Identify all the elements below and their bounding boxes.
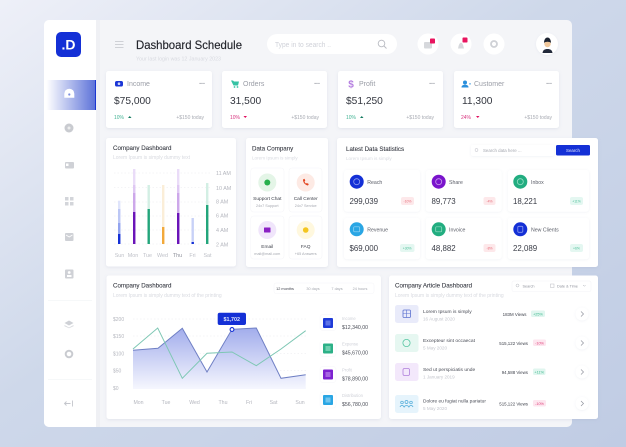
bar chart: Tue xyxy=(143,253,152,259)
stat tile: new clients: New Clients xyxy=(531,228,559,234)
legend: profit xyxy=(320,366,368,382)
legend: income: $12,340,00 xyxy=(342,325,368,331)
article filters: Search xyxy=(522,284,535,288)
stat tile: share: Share xyxy=(449,180,463,186)
article row 3 xyxy=(395,363,588,381)
bar chart: Sat xyxy=(203,253,212,259)
search field xyxy=(267,34,397,54)
bar chart xyxy=(114,169,232,259)
legend: profit: Profit xyxy=(342,368,353,372)
stat tile: share xyxy=(426,170,502,212)
subheading: Lorem Ipsum is simply xyxy=(346,156,392,161)
legend: income xyxy=(320,314,368,331)
legend: expense: Expense xyxy=(342,342,359,346)
stat tile: invoice: -8% xyxy=(486,246,493,250)
stat tile: inbox: Inbox xyxy=(531,180,544,186)
line chart: Mon xyxy=(133,400,144,406)
stat tile: revenue: Revenue xyxy=(367,228,388,234)
subheading: Lorem Ipsum is simply xyxy=(252,156,298,160)
tile: support chat: 24x7 Support xyxy=(256,204,280,208)
article row 3: 94,588 Views xyxy=(502,370,529,375)
stat tile: revenue: $69,000 xyxy=(350,244,379,253)
search field: Type in to search .. xyxy=(275,42,331,49)
article row 2: 515,122 Views xyxy=(499,341,529,346)
range tabs xyxy=(274,283,374,294)
stat card: profit: 10% xyxy=(346,115,357,121)
line chart: $150 xyxy=(113,334,124,340)
icon: settings xyxy=(484,34,504,54)
panel: latest data statistics xyxy=(337,138,598,267)
tile: email xyxy=(251,216,284,259)
panel: company dashboard bar chart xyxy=(106,138,236,266)
stat card: profit xyxy=(338,71,443,128)
article row 4: 515,122 Views xyxy=(499,402,529,406)
line chart: Sat xyxy=(270,400,278,406)
nav icon: layers xyxy=(64,320,74,328)
range tabs: 24 hours xyxy=(353,287,367,291)
nav icon: inbox xyxy=(65,233,74,241)
tile: call center: 24x7 Service xyxy=(295,204,317,208)
heading: Data Company xyxy=(252,146,294,152)
stat card: customer: +$150 today xyxy=(524,115,552,121)
line chart: Tue xyxy=(162,400,170,406)
article row 4: 5 May 2020 xyxy=(423,406,447,411)
stat card: customer: Customer xyxy=(474,81,505,88)
tile: faq xyxy=(289,216,322,259)
line chart: Fri xyxy=(246,400,252,406)
bar chart: 6 AM xyxy=(216,214,229,220)
range tabs: 30 days xyxy=(306,287,320,291)
article row 4 xyxy=(395,395,588,413)
sidebar xyxy=(44,20,100,427)
subheading: Lorem Ipsum is simply dummy text of the printing xyxy=(395,293,504,299)
article row 3: +11% xyxy=(534,370,545,374)
stat card: customer xyxy=(454,71,559,128)
heading: Company Dashboard xyxy=(113,145,172,152)
bar chart: 11 AM xyxy=(216,171,231,177)
tooltip xyxy=(218,313,246,331)
stat card: income: Income xyxy=(127,81,150,88)
nav item: home active xyxy=(46,80,96,110)
line chart: $100 xyxy=(113,352,124,358)
stat card: orders: ... xyxy=(314,79,320,86)
line chart xyxy=(113,313,306,406)
line chart: $200 xyxy=(113,317,124,323)
stat card: profit: Profit xyxy=(359,81,375,88)
article filters: Date & Time xyxy=(557,284,578,288)
stat tile: reach xyxy=(344,170,420,212)
article row 1: 16 August 2020 xyxy=(423,316,455,322)
search box xyxy=(471,145,554,156)
legend: distribution xyxy=(320,392,368,408)
stat card: orders xyxy=(222,71,327,128)
bar chart: Fri xyxy=(189,253,196,259)
legend: expense: $45,670,00 xyxy=(342,350,368,356)
panel: company article dashboard xyxy=(389,276,598,419)
article filters xyxy=(512,281,591,292)
tile: support chat xyxy=(251,168,284,212)
bar chart: 10 AM xyxy=(216,186,232,192)
article row 1 xyxy=(395,305,588,323)
last login subtitle: Your last login was 12 January 2023 xyxy=(136,56,221,62)
article row 2: -10% xyxy=(535,341,545,345)
nav icon: add xyxy=(64,124,74,132)
line chart: $50 xyxy=(113,368,122,374)
logo: .D xyxy=(62,36,76,52)
article row 1: Lorem Ipsum is simply xyxy=(423,309,472,315)
stat tile: new clients: 22,089 xyxy=(513,244,538,253)
panel: company dashboard line chart xyxy=(106,276,381,419)
tooltip: $1,702 xyxy=(224,317,240,323)
stat card: orders: 31,500 xyxy=(230,96,261,107)
nav icon: profile xyxy=(65,270,74,278)
article row 2: 5 May 2020 xyxy=(423,346,447,350)
nav icon: id card xyxy=(65,162,74,168)
stat card: income: $75,000 xyxy=(114,96,151,107)
line chart: $0 xyxy=(113,386,119,392)
article row 4: Dolore eu fugiat nulla pariatur xyxy=(423,398,486,404)
tile: call center: Call Center xyxy=(294,196,318,202)
stat tile: revenue xyxy=(344,218,420,259)
stat tile: inbox: 18,221 xyxy=(513,197,537,206)
logo xyxy=(56,32,81,57)
article row 2 xyxy=(395,334,588,352)
stat tile: new clients xyxy=(508,218,589,259)
stat card: income: ... xyxy=(199,79,205,86)
main dashboard panel xyxy=(44,20,572,427)
bar chart: Sun xyxy=(115,253,124,259)
stat card: orders: +$150 today xyxy=(291,115,319,121)
bar chart: Wed xyxy=(157,253,168,259)
stat tile: reach: Reach xyxy=(367,180,382,186)
heading: Company Article Dashboard xyxy=(395,282,473,290)
stat card: customer: 24% xyxy=(461,115,472,121)
avatar xyxy=(536,33,558,55)
line chart: Sun xyxy=(295,400,305,406)
stat card: customer: 11,300 xyxy=(462,96,493,107)
line chart: Wed xyxy=(189,400,200,406)
stat tile: share: 89,773 xyxy=(432,197,456,206)
article row 1: +25% xyxy=(533,312,544,316)
search button: Search xyxy=(566,148,581,153)
top bar xyxy=(115,33,558,62)
stat card: customer: ... xyxy=(546,79,552,86)
tile: faq: FAQ xyxy=(301,244,311,250)
legend: expense xyxy=(320,340,368,356)
stat tile: reach: 299,039 xyxy=(350,197,379,206)
stat tile: share: -4% xyxy=(486,200,493,204)
article row 3: 1 January 2019 xyxy=(423,374,455,380)
tile: support chat: Support Chat xyxy=(253,196,282,202)
tile: faq: +65 Answers xyxy=(295,252,317,256)
stat card: income xyxy=(106,71,212,128)
icon: orders xyxy=(231,80,239,88)
range tabs: 7 days xyxy=(331,287,343,291)
icon: profit: $ xyxy=(348,80,354,90)
stat tile: invoice xyxy=(426,218,502,259)
legend: income: Income xyxy=(342,316,356,321)
bar chart: 8 AM xyxy=(216,200,229,206)
stat card: income: 10% xyxy=(114,115,125,121)
legend: distribution: Distribution xyxy=(342,393,364,398)
article row 4: -10% xyxy=(535,402,545,406)
bar chart: Mon xyxy=(128,253,138,259)
search button xyxy=(556,145,590,156)
stat tile: invoice: Invoice xyxy=(449,228,466,234)
title: Dashboard Schedule xyxy=(136,38,242,52)
stat card: orders: Orders xyxy=(243,81,265,88)
line chart: Thu xyxy=(219,400,228,406)
tile: email: mail@mail.com xyxy=(254,252,280,256)
stat tile: revenue: +30% xyxy=(403,246,412,250)
nav icon: settings xyxy=(66,351,72,357)
tile: call center xyxy=(289,168,322,212)
stat tile: invoice: 48,882 xyxy=(432,244,456,253)
legend: profit: $78,890,00 xyxy=(342,376,368,382)
legend: distribution: $56,780,00 xyxy=(342,402,368,408)
nav icon: logout xyxy=(64,400,72,406)
stat tile: reach: -10% xyxy=(404,200,411,204)
range tabs: 12 months xyxy=(276,287,294,291)
article row 1: 183M Views xyxy=(503,312,527,317)
nav icon: grid xyxy=(65,197,74,206)
stat card: profit: ... xyxy=(429,79,435,86)
article row 2: Excepteur sint occaecat xyxy=(423,338,476,344)
stat card: orders: 10% xyxy=(230,115,241,121)
icon: bell with badge xyxy=(450,34,472,54)
panel: data company xyxy=(246,138,328,267)
tile: email: Email xyxy=(261,244,273,250)
bar chart: Thu xyxy=(173,253,182,259)
search box: Search data here ... xyxy=(483,148,522,153)
bar chart: 4 AM xyxy=(216,228,229,234)
stat card: profit: +$150 today xyxy=(406,115,434,121)
article row 3: Sed ut perspiciatis unde xyxy=(423,367,475,373)
subheading: Lorem Ipsum is simply dummy text xyxy=(113,155,191,161)
icon: income xyxy=(115,81,123,86)
heading: Company Dashboard xyxy=(113,282,172,290)
menu icon xyxy=(115,42,124,48)
stat card: income: +$150 today xyxy=(176,115,204,121)
subheading: Lorem Ipsum is simply dummy text of the printing xyxy=(113,293,222,299)
stat tile: new clients: +6% xyxy=(573,246,580,250)
stat tile: inbox: +11% xyxy=(572,200,581,204)
stat card: profit: $51,250 xyxy=(346,96,383,107)
bar chart: 2 AM xyxy=(216,242,229,248)
icon: mail with badge xyxy=(418,34,438,54)
icon: customer xyxy=(462,80,471,88)
heading: Latest Data Statistics xyxy=(346,146,404,153)
stat tile: inbox xyxy=(508,170,589,212)
